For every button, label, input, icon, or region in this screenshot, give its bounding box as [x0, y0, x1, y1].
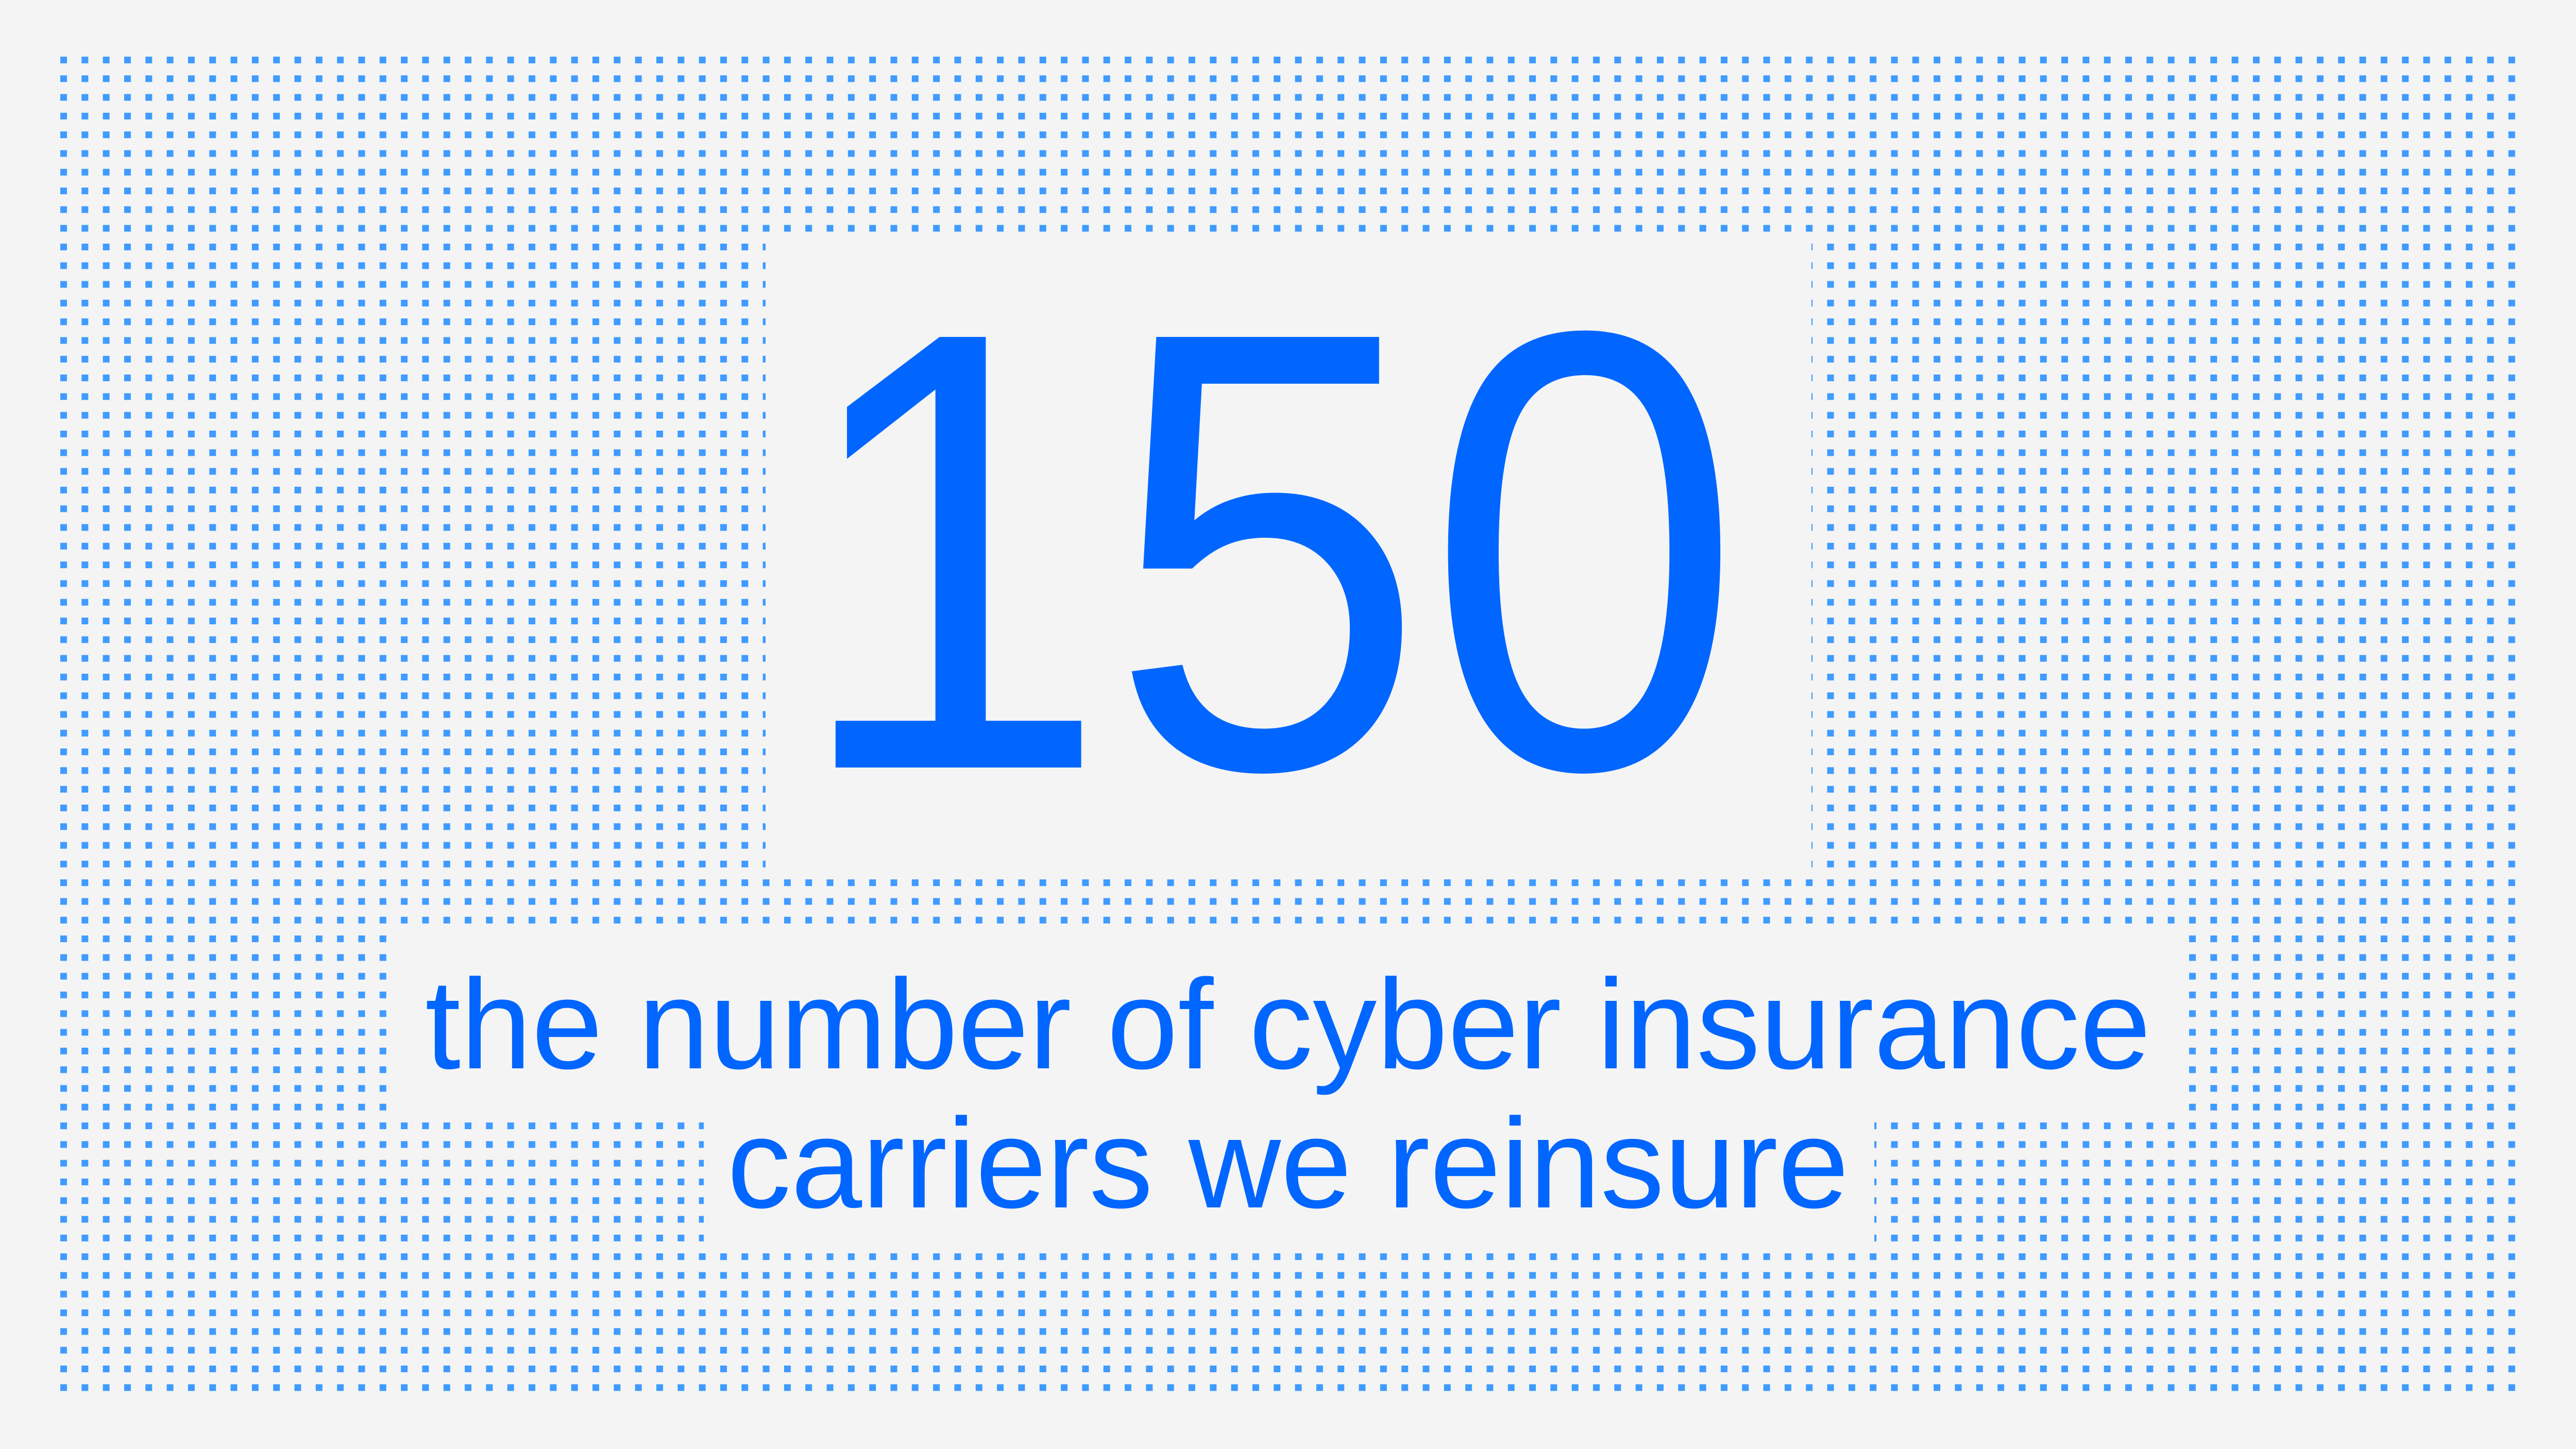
panel: caption line 2 box — [704, 1117, 1874, 1252]
panel: number box — [766, 238, 1811, 878]
caption text: the number of cyber insurance — [425, 952, 2151, 1096]
panel: caption line 1 box — [386, 929, 2189, 1118]
big number: 150 — [792, 201, 1742, 900]
caption text: carriers we reinsure — [727, 1092, 1849, 1235]
caption text — [425, 952, 2151, 1235]
